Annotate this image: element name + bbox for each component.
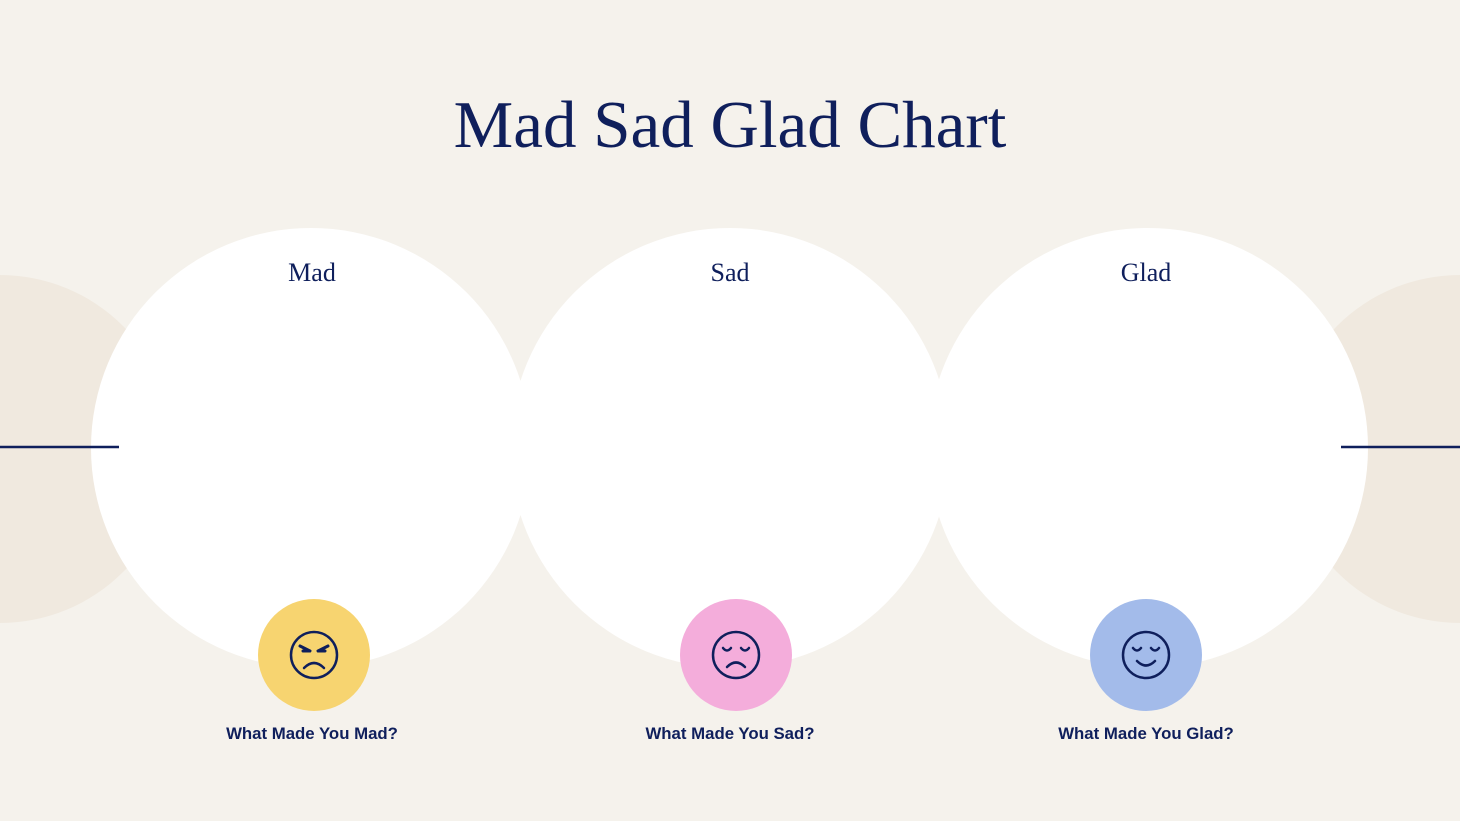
- title: Mad Sad Glad Chart: [454, 88, 1007, 162]
- label: mad question: What Made You Mad?: [226, 724, 398, 743]
- line left: [0, 446, 119, 448]
- heading: glad: Glad: [1121, 258, 1171, 287]
- icon: angry face: [258, 599, 370, 711]
- panel: mad: [91, 228, 531, 743]
- label: glad question: What Made You Glad?: [1058, 724, 1234, 743]
- heading: sad: Sad: [710, 258, 750, 287]
- icon: sad face: [680, 599, 792, 711]
- heading: mad: Mad: [288, 258, 336, 287]
- label: sad question: What Made You Sad?: [645, 724, 815, 743]
- icon: glad face: [1090, 599, 1202, 711]
- decorative side circle left: [0, 275, 174, 623]
- panel: sad: [510, 228, 950, 743]
- panel: glad: [928, 228, 1368, 743]
- decorative side circle right: [1286, 275, 1460, 623]
- line right: [1341, 446, 1460, 448]
